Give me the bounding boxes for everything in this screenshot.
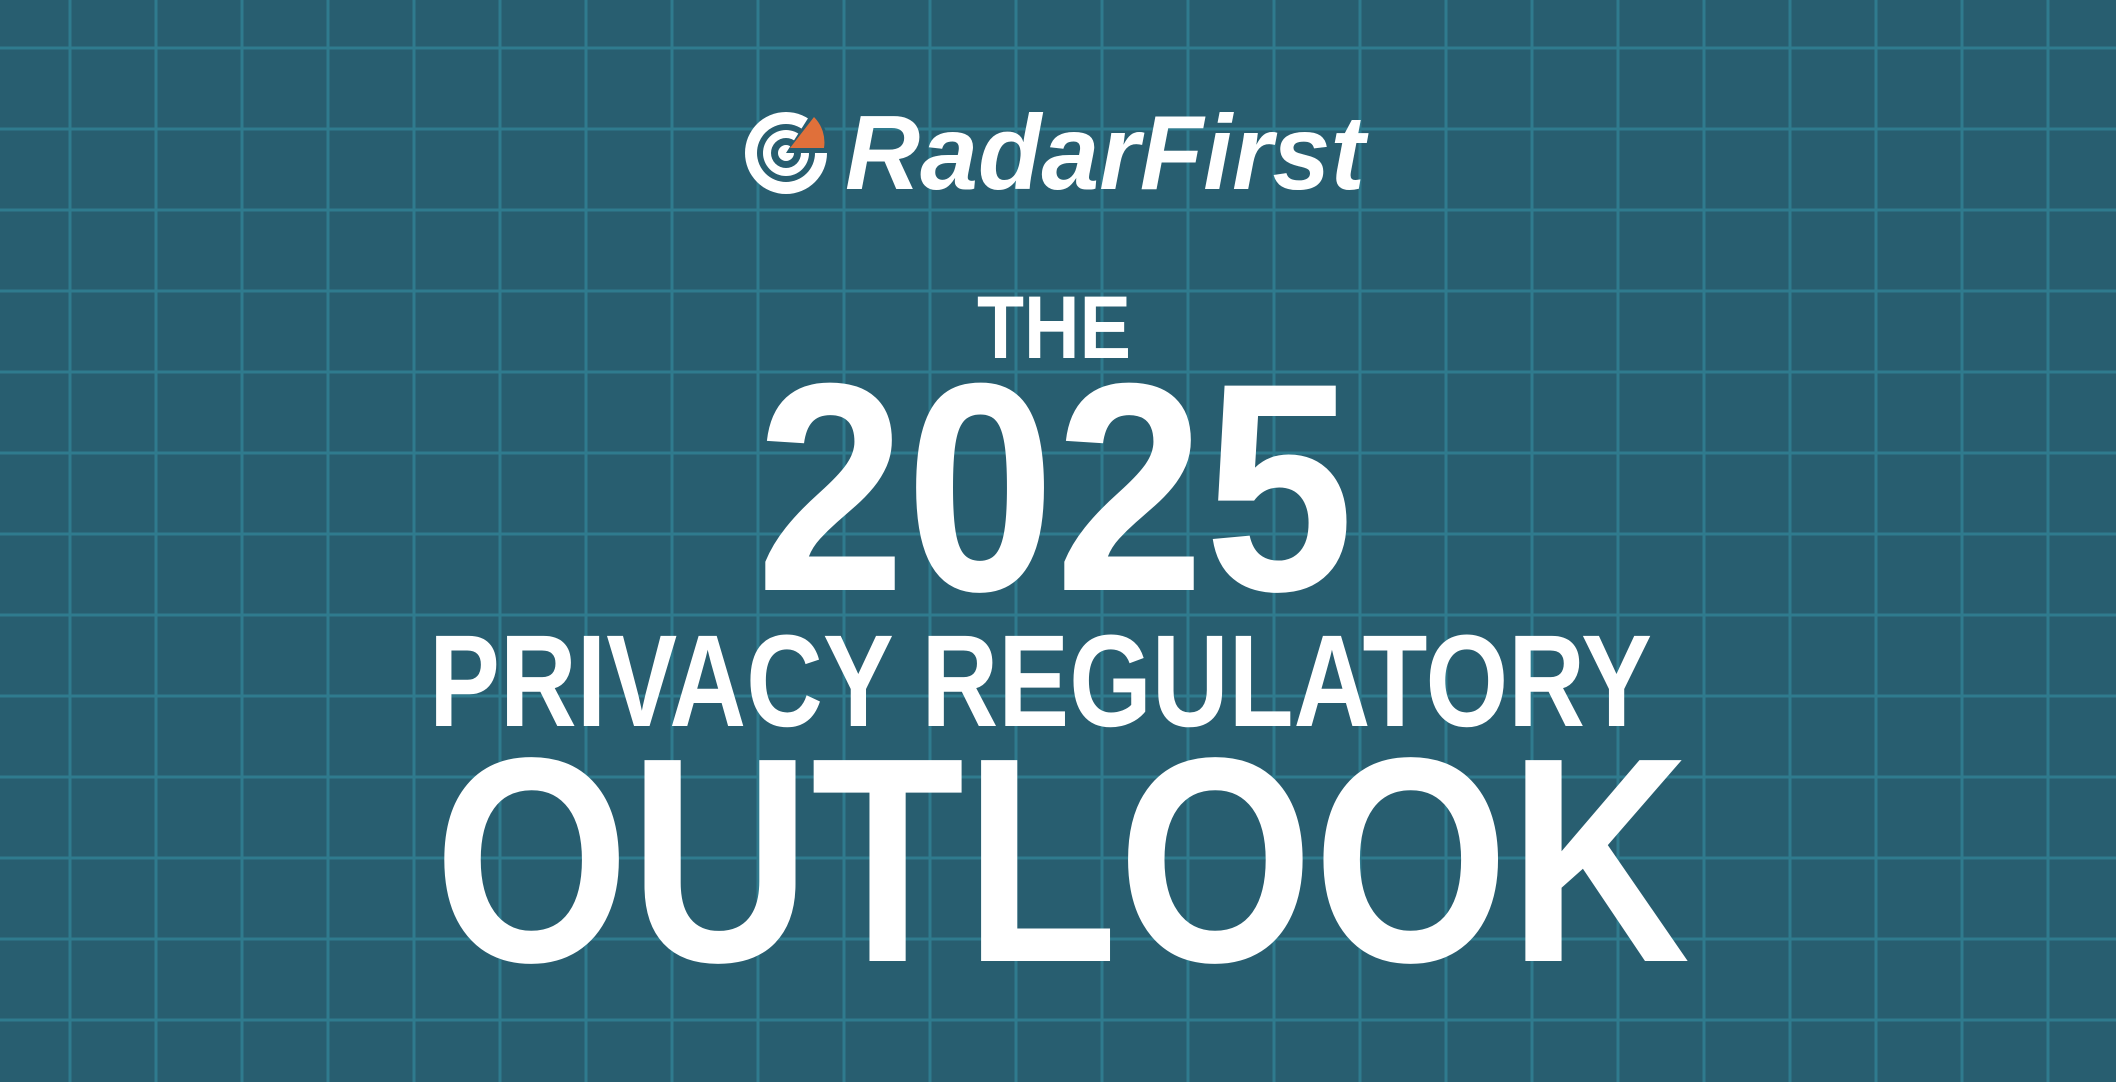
logo: RadarFirst bbox=[745, 94, 1369, 212]
title line: PRIVACY REGULATORY: PRIVACY REGULATORY bbox=[429, 607, 1652, 754]
title line: OUTLOOK: OUTLOOK bbox=[434, 697, 1690, 1023]
title line: THE: THE bbox=[977, 277, 1131, 377]
icon: radar bbox=[745, 112, 828, 194]
title bbox=[429, 277, 1690, 1023]
brand name: RadarFirst bbox=[845, 94, 1369, 212]
title line: 2025: 2025 bbox=[756, 321, 1354, 653]
